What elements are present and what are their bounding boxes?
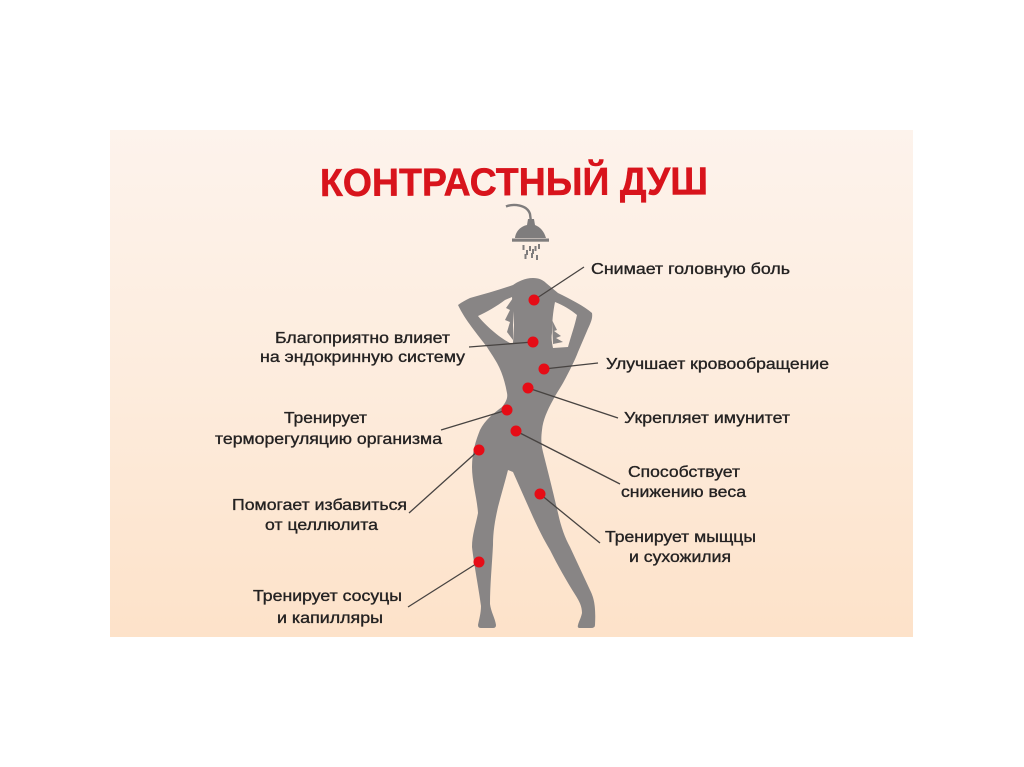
callout: circulation: Улучшает кровообращение <box>606 356 829 373</box>
callout: weight loss <box>510 426 746 501</box>
callout: cellulite <box>232 444 484 534</box>
callout: circulation <box>538 356 829 374</box>
callout: weight loss: снижению веса <box>621 484 746 501</box>
callout: vessels: и капилляры <box>277 610 383 627</box>
callout: thermoregulation <box>215 404 512 448</box>
callout: immunity <box>522 382 791 427</box>
callout: thermoregulation: Тренирует <box>284 410 368 427</box>
callout: endocrine <box>260 330 538 366</box>
background panel <box>110 130 913 637</box>
hair strands <box>505 298 563 344</box>
callout: endocrine: на эндокринную систему <box>260 349 465 366</box>
callout: immunity: Укрепляет имунитет <box>624 410 791 427</box>
callout: endocrine: Благоприятно влияет <box>275 330 451 347</box>
callout: muscles: и сухожилия <box>629 549 731 566</box>
callout: muscles: Тренирует мыщцы <box>605 529 756 546</box>
callout: cellulite: Помогает избавиться <box>232 497 407 514</box>
callout: headache <box>528 261 790 306</box>
callout: vessels: Тренирует сосуцы <box>253 588 402 605</box>
callout: headache: Снимает головную боль <box>591 261 790 278</box>
icon: shower <box>506 205 549 260</box>
callout: thermoregulation: терморегуляцию организма <box>215 431 442 448</box>
callout: muscles <box>534 488 756 566</box>
callout: vessels <box>253 556 484 627</box>
callout: cellulite: от целлюлита <box>265 517 378 534</box>
silhouette <box>458 278 595 628</box>
title: КОНТРАСТНЫЙ ДУШ <box>320 158 708 205</box>
callout: weight loss: Способствует <box>628 464 741 481</box>
